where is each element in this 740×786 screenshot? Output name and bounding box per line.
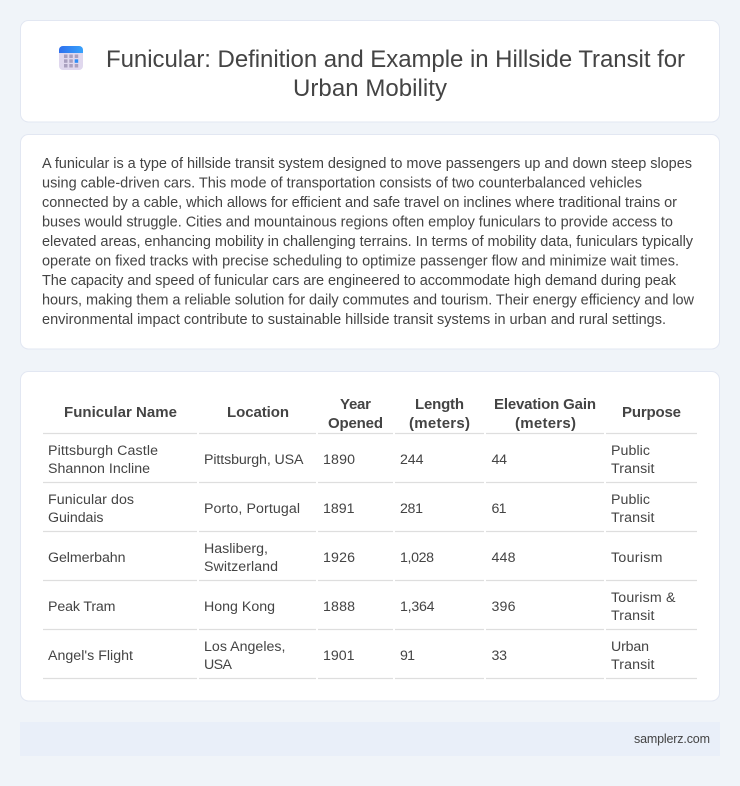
table row: Angel's Flight: 91: [400, 648, 415, 664]
table row: Peak Tram: 1888: [323, 599, 355, 615]
panel: description: [20, 134, 720, 349]
description text: elevated areas, enhancing mobility in challenging terrains. In terms of mobility data, funiculars typically: [42, 234, 694, 250]
description text: A funicular is a type of hillside transit system designed to move passengers up and down steep slopes: [42, 156, 692, 172]
table row: Gelmerbahn: Switzerland: [204, 559, 278, 575]
description text: The capacity and speed of funicular cars are engineered to accommodate high demand during peak: [42, 273, 677, 289]
table row: Pittsburgh Castle Shannon Incline: Shannon Incline: [48, 461, 150, 477]
footer bar: [20, 722, 720, 756]
table header: Funicular Name: [64, 404, 177, 421]
table header: Elevation Gain: [494, 396, 596, 413]
table row: Angel's Flight: Los Angeles,: [204, 639, 286, 655]
table row: Peak Tram: Peak Tram: [48, 599, 116, 615]
table header: (meters): [515, 415, 576, 432]
table row: Pittsburgh Castle Shannon Incline: 1890: [323, 452, 355, 468]
table row: Pittsburgh Castle Shannon Incline: Pittsburgh, USA: [204, 452, 304, 468]
description text: operate on fixed tracks with precise scheduling to optimize passenger flow and minimize wait times.: [42, 254, 679, 270]
description text: [42, 156, 695, 328]
table row: Angel's Flight: Angel's Flight: [48, 648, 133, 664]
table row: Angel's Flight: USA: [204, 657, 233, 673]
table row: Pittsburgh Castle Shannon Incline: Public: [611, 443, 650, 459]
table row: Angel's Flight: 33: [492, 648, 507, 664]
table row: Funicular dos Guindais: 1891: [323, 501, 355, 517]
table row: Gelmerbahn: Gelmerbahn: [48, 550, 126, 566]
table header: Location: [227, 404, 289, 421]
table header: [64, 396, 681, 432]
title: [106, 46, 685, 102]
table row: Gelmerbahn: Tourism: [611, 550, 662, 566]
description text: buses would struggle. Cities and mountainous regions often employ funiculars to provide access to: [42, 214, 673, 230]
table row: Peak Tram: Tourism &: [611, 590, 676, 606]
table row: Angel's Flight: [48, 639, 655, 673]
description text: hours, making them a reliable solution for daily commutes and tourism. Their energy efficiency and low: [42, 292, 695, 308]
table row: Funicular dos Guindais: Public: [611, 492, 650, 508]
table row: Peak Tram: Transit: [611, 608, 655, 624]
description text: using cable-driven cars. This mode of transportation consists of two counterbalanced vehicles: [42, 176, 642, 192]
table row: Angel's Flight: 1901: [323, 648, 355, 664]
table row: Angel's Flight: Transit: [611, 657, 655, 673]
panel: funicular table: [20, 372, 720, 701]
table row: Pittsburgh Castle Shannon Incline: 44: [492, 452, 507, 468]
icon: calendar grid: [59, 46, 83, 70]
table header: Length: [415, 396, 464, 413]
table row: Funicular dos Guindais: Transit: [611, 510, 655, 526]
table header: Purpose: [622, 404, 681, 421]
table row: Peak Tram: 1,364: [400, 599, 435, 615]
table header: Opened: [328, 415, 383, 432]
table row: Funicular dos Guindais: 281: [400, 501, 423, 517]
title: Funicular: Definition and Example in Hillside Transit for: [106, 46, 685, 73]
table row: Pittsburgh Castle Shannon Incline: 244: [400, 452, 424, 468]
table row: Pittsburgh Castle Shannon Incline: [48, 443, 655, 477]
table row: Funicular dos Guindais: [48, 492, 655, 526]
table row: Pittsburgh Castle Shannon Incline: Pittsburgh Castle: [48, 443, 158, 459]
table row: Gelmerbahn: 448: [492, 550, 516, 566]
table header: Year: [340, 396, 371, 413]
table row: Funicular dos Guindais: Guindais: [48, 510, 104, 526]
table row: Peak Tram: 396: [492, 599, 516, 615]
table row: Peak Tram: Hong Kong: [204, 599, 275, 615]
table row: Gelmerbahn: [48, 541, 662, 575]
table row: Angel's Flight: Urban: [611, 639, 649, 655]
table row: Gelmerbahn: 1,028: [400, 550, 434, 566]
description text: environmental impact contribute to sustainable hillside transit systems in urban and rural settings.: [42, 312, 666, 328]
table header: (meters): [409, 415, 470, 432]
description text: connected by a cable, which allows for efficient and safe travel on inclines where traditional trains or: [42, 195, 677, 211]
table row: Gelmerbahn: Hasliberg,: [204, 541, 268, 557]
table row: Funicular dos Guindais: Funicular dos: [48, 492, 134, 508]
title: Urban Mobility: [293, 75, 447, 102]
table row: Gelmerbahn: 1926: [323, 550, 355, 566]
table row: Peak Tram: [48, 590, 676, 624]
footer source text: samplerz.com: [634, 732, 710, 746]
panel: title card: [20, 20, 720, 122]
table row: Pittsburgh Castle Shannon Incline: Transit: [611, 461, 655, 477]
table row: Funicular dos Guindais: 61: [492, 501, 507, 517]
table row: Funicular dos Guindais: Porto, Portugal: [204, 501, 300, 517]
